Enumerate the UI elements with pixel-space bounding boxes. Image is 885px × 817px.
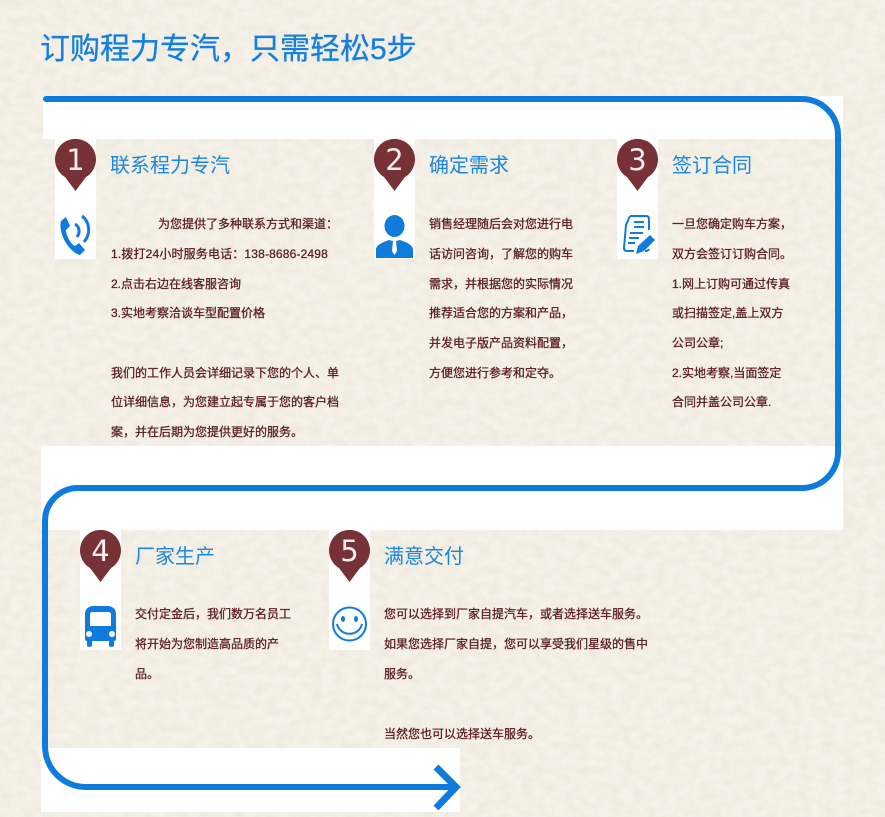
step 3 text: 或扫描签定,盖上双方 bbox=[672, 306, 783, 320]
pin 1: 1 bbox=[66, 143, 85, 177]
step 2 bbox=[374, 139, 573, 380]
step 2 text: 方便您进行参考和定夺。 bbox=[429, 366, 561, 380]
step 3 text: 合同并盖公司公章. bbox=[672, 395, 771, 409]
white band: top bbox=[43, 96, 843, 139]
step 4 text: 交付定金后，我们数万名员工 bbox=[135, 607, 291, 621]
step 3 text: 双方会签订订购合同。 bbox=[672, 247, 792, 261]
step 4 bbox=[80, 530, 291, 681]
step 2 text: 销售经理随后会对您进行电 bbox=[429, 217, 573, 231]
step 3 text bbox=[672, 217, 792, 409]
step 3 text: 2.实地考察,当面签定 bbox=[672, 366, 781, 380]
title: 订购程力专汽，只需轻松5步 bbox=[40, 33, 417, 66]
step 5 heading: 满意交付 bbox=[384, 546, 464, 568]
step 4 text: 品。 bbox=[135, 667, 159, 681]
step 1 text: 案，并在后期为您提供更好的服务。 bbox=[111, 425, 303, 439]
step 1 text: 位详细信息，为您建立起专属于您的客户档 bbox=[111, 395, 339, 409]
step 5 text: 当然您也可以选择送车服务。 bbox=[384, 727, 540, 741]
pin 2: 2 bbox=[385, 143, 404, 177]
white band: bottom bbox=[41, 748, 460, 812]
icon: phone bbox=[60, 214, 90, 255]
step 1 bbox=[55, 139, 339, 439]
step 1 text: 1.拨打24小时服务电话：138-8686-2498 bbox=[111, 247, 328, 261]
step 2 text: 推荐适合您的方案和产品， bbox=[429, 306, 573, 320]
step 3 heading: 签订合同 bbox=[672, 155, 752, 177]
step 2 text: 话访问咨询，了解您的购车 bbox=[429, 247, 573, 261]
step 2 text bbox=[429, 217, 573, 380]
step 2 text: 并发电子版产品资料配置， bbox=[429, 336, 573, 350]
icon: smiley bbox=[332, 606, 367, 642]
step 5 text: 如果您选择厂家自提，您可以享受我们星级的售中 bbox=[384, 637, 648, 651]
pin 1 bbox=[55, 139, 96, 191]
step 1 text bbox=[111, 217, 339, 439]
step 5 bbox=[329, 530, 648, 741]
step 5 text: 服务。 bbox=[384, 667, 420, 681]
step 2 text: 需求，并根据您的实际情况 bbox=[429, 277, 573, 291]
step 5 text bbox=[384, 607, 648, 741]
step 3 text: 一旦您确定购车方案， bbox=[672, 217, 792, 231]
icon: person bbox=[376, 215, 413, 258]
step 1 heading: 联系程力专汽 bbox=[110, 155, 230, 177]
step 1 marker column bbox=[55, 139, 96, 259]
step 4 text: 将开始为您制造高品质的产 bbox=[135, 637, 279, 651]
step 3 marker column bbox=[617, 139, 658, 259]
step 1 text: 为您提供了多种联系方式和渠道： bbox=[158, 217, 338, 231]
pin 3 bbox=[617, 139, 658, 191]
pin 5 bbox=[329, 530, 370, 582]
icon: bus bbox=[85, 606, 116, 647]
step 4 heading: 厂家生产 bbox=[135, 546, 215, 568]
pin 3: 3 bbox=[628, 143, 647, 177]
step 2 heading: 确定需求 bbox=[429, 155, 509, 177]
pin 5: 5 bbox=[340, 534, 359, 568]
step 4 text bbox=[135, 607, 291, 681]
pin 4: 4 bbox=[91, 534, 110, 568]
step 5 text: 您可以选择到厂家自提汽车，或者选择送车服务。 bbox=[384, 607, 648, 621]
step 1 text: 2.点击右边在线客服咨询 bbox=[111, 277, 241, 291]
step 3 bbox=[617, 139, 792, 409]
pin 2 bbox=[374, 139, 415, 191]
step 3 text: 1.网上订购可通过传真 bbox=[672, 277, 790, 291]
step 2 marker column bbox=[374, 139, 415, 259]
white band: middle bbox=[41, 446, 843, 530]
step 3 text: 公司公章; bbox=[672, 336, 723, 350]
step 5 marker column bbox=[329, 530, 370, 650]
pin 4 bbox=[80, 530, 121, 582]
icon: contract with pen bbox=[623, 215, 655, 254]
step 1 text: 3.实地考察洽谈车型配置价格 bbox=[111, 306, 265, 320]
step 4 marker column bbox=[80, 530, 121, 650]
step 1 text: 我们的工作人员会详细记录下您的个人、单 bbox=[111, 366, 339, 380]
